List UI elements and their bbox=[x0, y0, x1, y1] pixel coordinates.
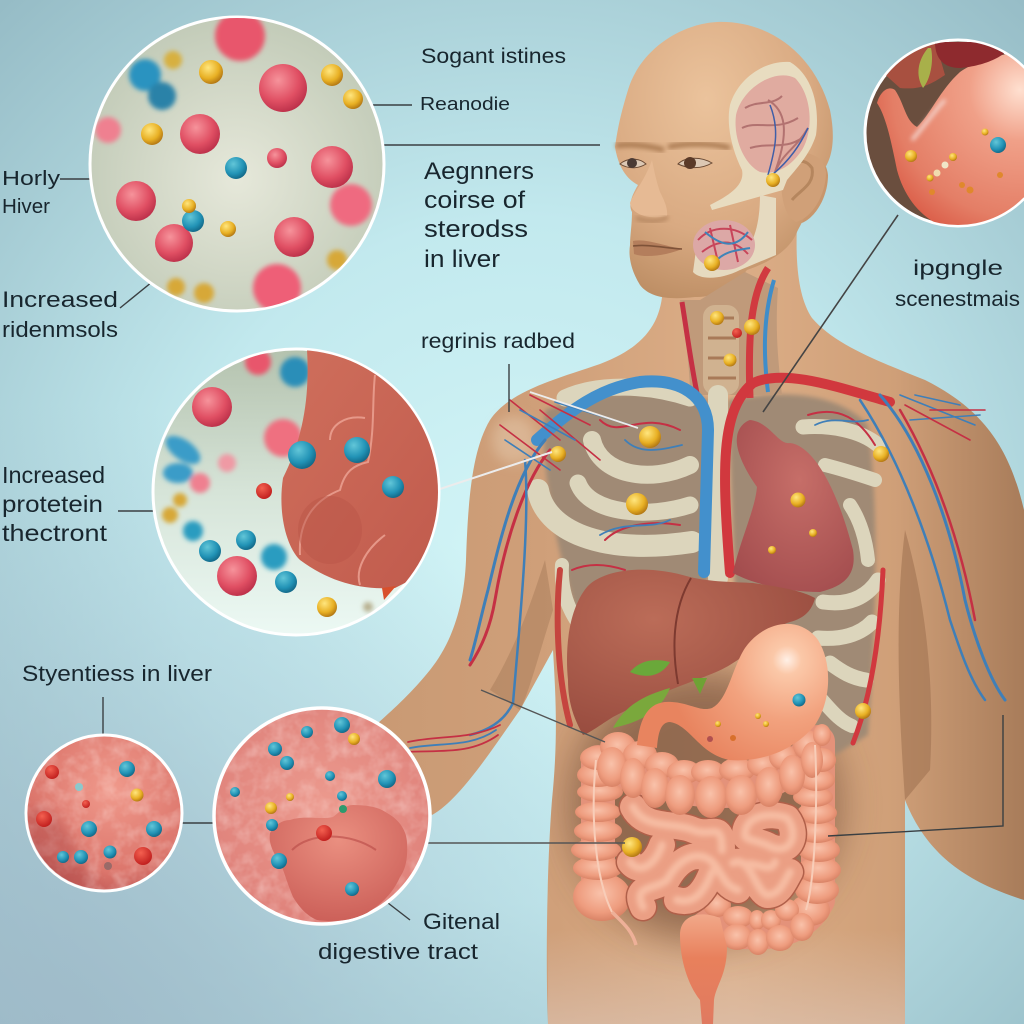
ascending colon bbox=[571, 746, 631, 921]
shoulder joint highlight bbox=[492, 416, 536, 464]
tissue texture bbox=[26, 735, 182, 891]
human figure body bbox=[377, 22, 1024, 1024]
lip line bbox=[633, 245, 682, 249]
left arm shading bbox=[490, 560, 553, 710]
background texture bbox=[214, 708, 430, 924]
label: increased top: ridenmsols bbox=[2, 317, 118, 342]
label: regrinis radbed: regrinis radbed bbox=[421, 330, 575, 353]
iris left bbox=[627, 158, 637, 168]
zoom circle: digestive tissue bbox=[214, 708, 430, 924]
label: increased top bbox=[2, 287, 118, 342]
label: increased protein bbox=[2, 462, 108, 546]
iris right bbox=[684, 157, 696, 169]
label: top right bbox=[895, 256, 1020, 311]
tissue lump bbox=[270, 805, 407, 921]
label: digestive tract: Gitenal bbox=[423, 909, 500, 934]
oral vessels bbox=[698, 225, 752, 262]
label: digestive tract bbox=[318, 909, 500, 964]
highlight bbox=[912, 100, 945, 140]
lump fold bbox=[292, 836, 376, 850]
leaf bbox=[918, 48, 932, 88]
trachea bbox=[703, 305, 739, 395]
lobe bulge bbox=[298, 496, 331, 544]
label: reanodie: Reanodie bbox=[420, 93, 510, 114]
heading: course of steroids: Aegnners bbox=[424, 158, 534, 185]
zoom circle: liver tissue small bbox=[26, 735, 182, 891]
brow left bbox=[616, 145, 664, 150]
heading: course of steroids bbox=[424, 158, 534, 273]
lower torso fade bbox=[548, 930, 905, 1024]
label: increased protein: Increased bbox=[2, 462, 105, 488]
lobe folds bbox=[300, 375, 385, 585]
label: hourly liver: Horly bbox=[2, 168, 60, 190]
abdomen shadow bbox=[570, 670, 840, 940]
small intestine coils bbox=[630, 807, 793, 907]
neck structures bbox=[680, 272, 782, 395]
chest vessel streaks red bbox=[572, 412, 875, 570]
dark organ piece bbox=[886, 44, 945, 88]
label: increased protein: protetein bbox=[2, 491, 103, 517]
skull cutaway bbox=[710, 62, 817, 210]
heading: course of steroids: coirse of bbox=[424, 187, 525, 214]
organ: liver bbox=[567, 570, 815, 735]
leader lines bbox=[60, 105, 1003, 920]
label: increased top: Increased bbox=[2, 287, 118, 312]
chest vessel streaks blue bbox=[600, 420, 868, 535]
blurred background molecules bbox=[95, 11, 372, 312]
neck vessel left bbox=[682, 302, 698, 398]
colon band lines bbox=[594, 745, 816, 912]
label: hourly liver bbox=[2, 168, 60, 218]
zoom circle: top right stomach bbox=[865, 40, 1024, 240]
chest cavity left bbox=[544, 392, 708, 610]
right arm shading bbox=[899, 530, 931, 800]
neck vessel right bbox=[749, 268, 768, 398]
oral tissue bbox=[693, 220, 755, 270]
leaves bbox=[630, 660, 670, 676]
colon underlay bbox=[598, 742, 818, 933]
label: increased protein: thectront bbox=[2, 520, 108, 546]
brow right bbox=[668, 144, 730, 148]
rectum bbox=[680, 914, 727, 1024]
eye left bbox=[620, 159, 646, 168]
ribcage bbox=[538, 387, 878, 726]
heading: course of steroids: sterodss bbox=[424, 216, 528, 243]
label: digestive tract: digestive tract bbox=[318, 939, 478, 964]
liver lobe bbox=[281, 350, 450, 588]
top liver piece bbox=[935, 42, 1012, 68]
zoom circle: top left molecules bbox=[90, 11, 384, 312]
lips bbox=[633, 240, 682, 256]
tissue shadow bbox=[28, 808, 95, 890]
ear front bbox=[781, 153, 826, 222]
organ: lung bbox=[733, 420, 854, 592]
stomach surface bbox=[877, 54, 1024, 225]
head bbox=[615, 22, 833, 298]
brain folds bbox=[742, 96, 808, 172]
label: top right: scenestmais bbox=[895, 287, 1020, 311]
appendix bbox=[612, 912, 636, 945]
organ: intestines bbox=[571, 724, 841, 1024]
label: top heading small: Sogant istines bbox=[421, 44, 566, 68]
eye right bbox=[678, 158, 712, 168]
brain vessels bbox=[768, 105, 808, 175]
label: top right: ipgngle bbox=[913, 256, 1003, 280]
neck vein bbox=[765, 280, 774, 392]
jaw bone bbox=[693, 195, 776, 278]
trachea rings bbox=[708, 318, 736, 378]
nose shadow bbox=[636, 217, 668, 221]
nose bbox=[630, 160, 667, 217]
label: synthesis in liver: Styentiess in liver bbox=[22, 661, 212, 686]
body markers bbox=[550, 173, 889, 719]
heading: course of steroids: in liver bbox=[424, 246, 500, 273]
organ: stomach bbox=[637, 624, 828, 760]
chest cavity right bbox=[728, 394, 876, 755]
torso and arms bbox=[377, 225, 1024, 1024]
zoom circle: mid protein bbox=[153, 349, 450, 635]
oral vessels blue bbox=[705, 232, 750, 262]
transverse colon bbox=[597, 724, 831, 818]
ear bbox=[784, 151, 828, 224]
brain bbox=[736, 75, 810, 173]
label: hourly liver: Hiver bbox=[2, 196, 50, 218]
ear inner bbox=[790, 161, 812, 200]
descending colon bbox=[790, 748, 841, 926]
sigmoid colon bbox=[703, 893, 814, 955]
blood vessels bbox=[405, 378, 1005, 752]
